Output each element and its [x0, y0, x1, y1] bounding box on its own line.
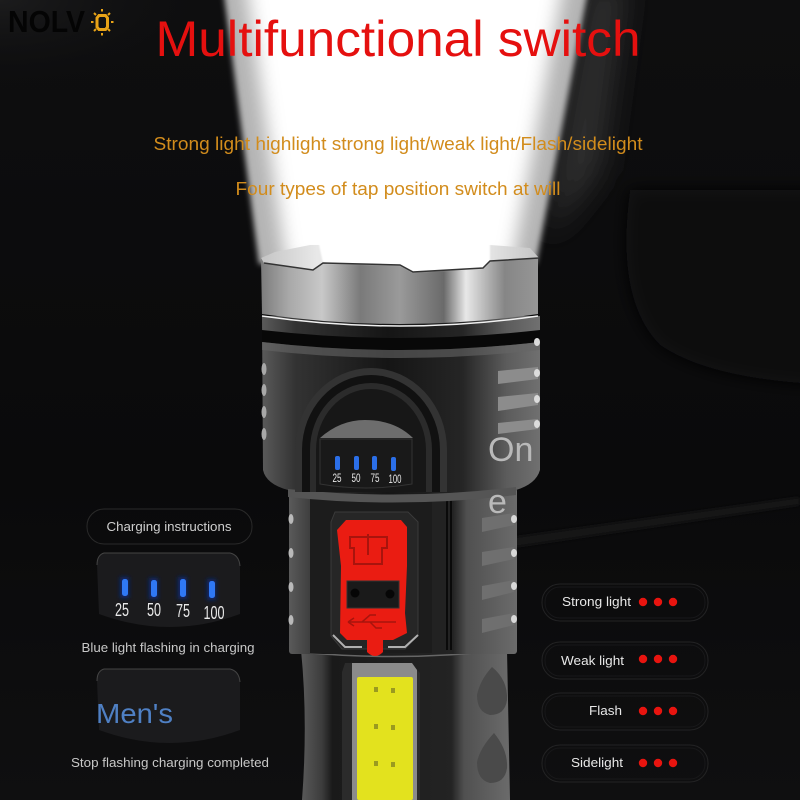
subtitle lines: Strong light highlight strong light/weak light/Flash/sidelight	[154, 134, 642, 154]
bezel ring	[261, 240, 539, 326]
battery display: 100	[388, 472, 402, 486]
stray label: One: e	[488, 483, 507, 521]
heading pill	[87, 509, 252, 544]
battery card: completed	[96, 669, 240, 743]
icon: bulb O	[91, 9, 114, 36]
battery display: 25	[332, 471, 342, 485]
mode: sidelight: Sidelight	[571, 755, 623, 770]
battery card: flashing: 75	[176, 601, 190, 621]
mode: weak light	[542, 642, 708, 679]
caption: flashing: Blue light flashing in charging	[82, 640, 254, 655]
grip ridges	[482, 513, 514, 633]
battery card: flashing: 100	[204, 603, 224, 623]
panel: light modes	[542, 584, 708, 782]
mode: strong light: Strong light	[562, 594, 631, 609]
heading pill: Charging instructions	[106, 519, 232, 534]
battery arch	[295, 368, 447, 492]
mode: flash: Flash	[589, 703, 622, 718]
icon: usb	[348, 615, 396, 628]
logo: NOLV	[8, 4, 85, 39]
icon: power symbol	[350, 534, 387, 564]
battery card: flashing: 25	[115, 600, 129, 620]
battery card: flashing: 50	[147, 600, 161, 620]
title: Multifunctional switch	[156, 11, 640, 67]
port	[347, 581, 399, 608]
panel: charging instructions	[71, 509, 269, 770]
battery card: flashing	[97, 553, 240, 627]
subtitle lines: Four types of tap position switch at will	[236, 179, 560, 199]
battery display	[320, 439, 412, 488]
stray label: One	[488, 431, 533, 521]
subtitle lines	[154, 134, 642, 199]
battery display: 75	[370, 471, 380, 485]
stray label: One: On	[488, 431, 533, 469]
mode: strong light	[542, 584, 708, 621]
mid body	[288, 488, 517, 654]
caption: completed: Stop flashing charging completed	[71, 755, 269, 770]
grip ridges	[498, 367, 538, 434]
lower body	[300, 650, 510, 800]
battery card: completed: Men's	[96, 698, 173, 729]
cob panel	[342, 663, 420, 800]
battery display: 50	[352, 471, 361, 485]
head body	[262, 316, 540, 503]
flashlight	[261, 240, 540, 800]
mode: sidelight	[542, 745, 708, 782]
light beam	[222, 0, 625, 264]
switch	[337, 520, 407, 656]
mode: flash	[542, 693, 708, 730]
mode: weak light: Weak light	[561, 653, 624, 668]
